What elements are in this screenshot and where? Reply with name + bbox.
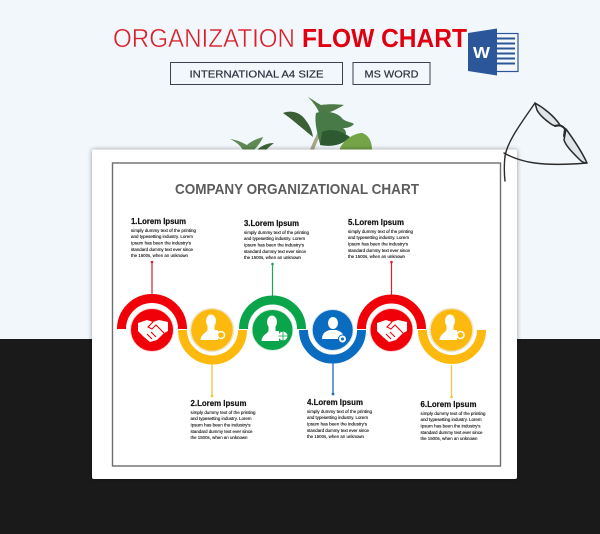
arc: step 3 green — [244, 300, 302, 329]
text block: step 3: simply dummy text of the printing — [244, 230, 309, 236]
icon: handshake red — [130, 308, 174, 352]
text block: step 6 — [420, 399, 486, 442]
text block: step 5: simply dummy text of the printing — [348, 229, 413, 235]
connector: step 2 — [211, 364, 213, 397]
text block: step 4: simply dummy text of the printing — [307, 409, 372, 415]
text block: step 1: simply dummy text of the printing — [131, 228, 196, 234]
arc: step 4 blue — [304, 330, 362, 359]
text block: step 6: simply dummy text of the printing — [420, 411, 486, 417]
background: dark lower band — [0, 339, 600, 534]
icon: handshake red second — [370, 308, 413, 352]
text block: step 2: Ipsum has been the industry's — [190, 422, 251, 428]
text block: step 1: Ipsum has been the industry's — [131, 240, 192, 246]
icon: person green — [252, 310, 293, 350]
document sheet — [92, 150, 517, 479]
text block: step 4: and typesetting industry. Lorem — [307, 415, 368, 421]
arc: step 6 yellow — [422, 330, 482, 360]
tag: MS Word — [353, 62, 430, 84]
text block: step 4 — [307, 397, 372, 440]
connector: step 3 — [271, 263, 274, 296]
page title: ORGANIZATION — [113, 23, 295, 53]
icon: person blue — [312, 310, 353, 350]
tag: international A4 size: INTERNATIONAL A4 SIZE — [190, 68, 324, 80]
page title: FLOW CHART — [302, 23, 467, 53]
sheet inner frame — [112, 163, 500, 466]
text block: step 1 — [131, 216, 196, 259]
text block: step 6: 6.Lorem Ipsum — [420, 399, 477, 409]
text block: step 1: and typesetting industry. Lorem — [131, 234, 193, 240]
arc: step 5 red — [362, 299, 422, 329]
icon: Word document: W — [473, 45, 491, 62]
text block: step 1: standard dummy text ever since — [131, 247, 193, 253]
text block: step 4: 4.Lorem Ipsum — [307, 397, 363, 407]
text block: step 2: and typesetting industry. Lorem — [190, 416, 252, 422]
text block: step 1: the 1500s, when an unknown — [131, 253, 188, 259]
connector: step 6 — [450, 365, 453, 398]
text block: step 6: standard dummy text ever since — [420, 430, 483, 436]
chart heading: COMPANY ORGANIZATIONAL CHART — [175, 181, 419, 198]
plant behind the sheet — [230, 97, 372, 150]
text block: step 5: and typesetting industry. Lorem — [348, 235, 409, 241]
connector: step 5 — [390, 261, 393, 295]
icon: Word document — [468, 28, 518, 76]
text block: step 5 — [348, 217, 413, 260]
text block: step 3: standard dummy text ever since — [244, 249, 306, 255]
icon: person yellow second — [430, 308, 473, 352]
background: light upper band — [0, 0, 600, 339]
text block: step 2: 2.Lorem Ipsum — [190, 398, 247, 408]
connector: step 1 — [151, 261, 153, 295]
arc: step 2 yellow — [182, 330, 243, 360]
tag: international A4 size — [170, 62, 342, 84]
text block: step 3 — [244, 218, 309, 261]
icon: sketched glasses — [504, 103, 587, 181]
connector: step 4 — [332, 362, 334, 395]
text block: step 2: standard dummy text ever since — [190, 429, 253, 435]
text block: step 6: and typesetting industry. Lorem — [420, 417, 482, 423]
text block: step 5: 5.Lorem Ipsum — [348, 217, 404, 227]
text block: step 2: the 1500s, when an unknown — [190, 435, 248, 441]
text block: step 2 — [190, 398, 256, 441]
text block: step 3: and typesetting industry. Lorem — [244, 236, 305, 242]
icon: person yellow — [190, 308, 234, 352]
text block: step 5: the 1500s, when an unknown — [348, 254, 405, 260]
text block: step 4: the 1500s, when an unknown — [307, 434, 364, 440]
text block: step 3: the 1500s, when an unknown — [244, 255, 301, 261]
tag: MS Word: MS WORD — [364, 68, 419, 80]
text block: step 5: standard dummy text ever since — [348, 248, 410, 254]
arc: step 1 red — [122, 298, 182, 329]
text block: step 5: Ipsum has been the industry's — [348, 242, 409, 248]
text block: step 4: standard dummy text ever since — [307, 428, 369, 434]
text block: step 4: Ipsum has been the industry's — [307, 422, 368, 428]
text block: step 3: Ipsum has been the industry's — [244, 242, 305, 248]
text block: step 1: 1.Lorem Ipsum — [131, 216, 186, 226]
page title — [113, 23, 467, 53]
text block: step 2: simply dummy text of the printing — [190, 410, 256, 416]
text block: step 6: the 1500s, when an unknown — [420, 436, 478, 442]
text block: step 6: Ipsum has been the industry's — [420, 424, 481, 430]
text block: step 3: 3.Lorem Ipsum — [244, 218, 299, 228]
